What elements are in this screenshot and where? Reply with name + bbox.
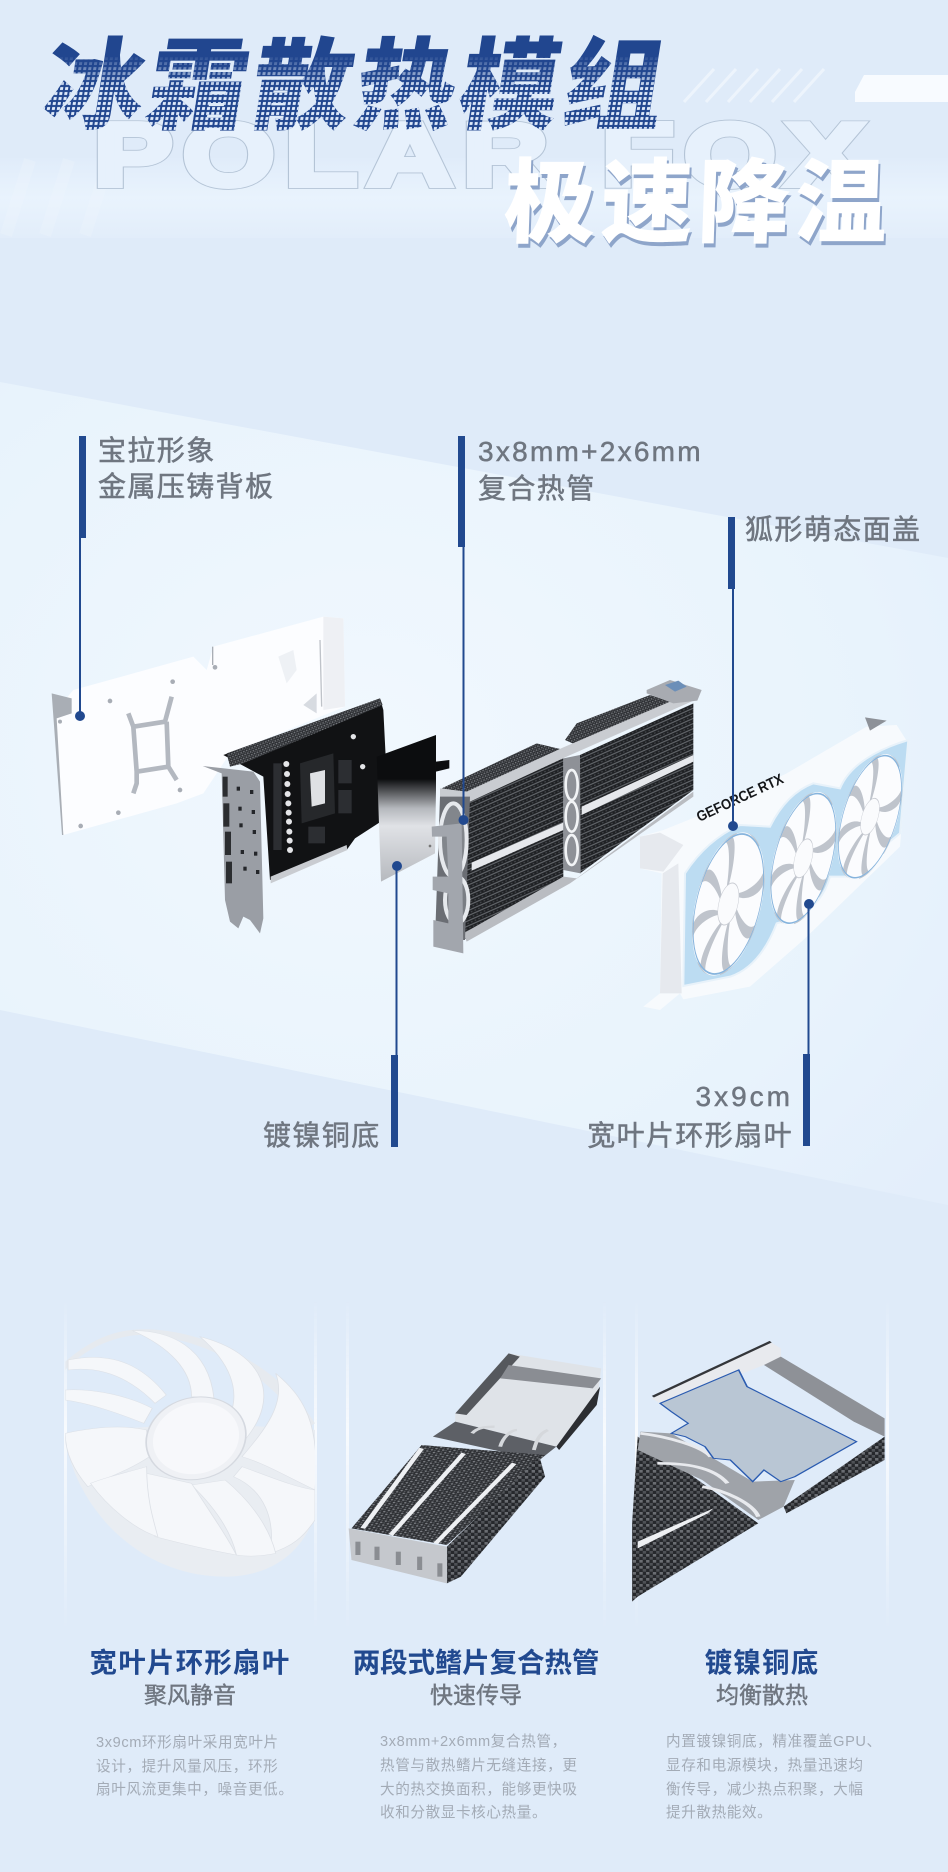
exploded view: backplate (52, 617, 345, 835)
decorative white stripes (6, 69, 948, 235)
column 2 text: 两段式鳍片复合热管: 3x8mm+2x6mm复合热管， (380, 1732, 567, 1750)
callout: 宽叶片环形扇叶: 宽叶片环形扇叶 (587, 1120, 793, 1151)
column 3 text: 镀镍铜底: 镀镍铜底 (705, 1647, 819, 1678)
subtitle: 极速降温: 极速降温 (502, 152, 894, 255)
callout: 宝拉形象金属压铸背板: 宝拉形象 (98, 435, 216, 466)
column 2 text: 两段式鳍片复合热管: 收和分散显卡核心热量。 (380, 1804, 547, 1821)
callout: 狐形萌态面盖 (728, 514, 921, 831)
column 3 text: 镀镍铜底: 提升散热能效。 (666, 1804, 772, 1821)
callout: 镀镍铜底: 镀镍铜底 (263, 1120, 381, 1151)
column 2 text: 两段式鳍片复合热管: 快速传导 (430, 1682, 522, 1708)
panel image: two-stage fin heatsink (349, 1353, 601, 1583)
panel image: nickel-plated base close-up (632, 1342, 885, 1602)
callout: 复合热管 (458, 436, 702, 825)
column 1 text: 宽叶片环形扇叶: 宽叶片环形扇叶 (90, 1647, 290, 1678)
column 3 text: 镀镍铜底: 内置镀镍铜底，精准覆盖GPU、 (666, 1733, 882, 1750)
column 2 text: 两段式鳍片复合热管: 两段式鳍片复合热管 (353, 1647, 599, 1678)
column 1 text: 宽叶片环形扇叶: 扇叶风流更集中，噪音更低。 (96, 1781, 294, 1798)
exploded view: nickel-plated copper base (377, 735, 449, 882)
column 1 text: 宽叶片环形扇叶 (90, 1647, 294, 1798)
column 1 text: 宽叶片环形扇叶: 3x9cm环形扇叶采用宽叶片 (96, 1734, 279, 1751)
background wordmark: POLAR FOX: POLAR FOX (94, 105, 875, 204)
callout: 宝拉形象金属压铸背板: 金属压铸背板 (98, 471, 274, 502)
callout: 镀镍铜底 (263, 861, 402, 1151)
exploded view: white shroud with three fans (640, 717, 932, 1012)
column 3 text: 镀镍铜底 (666, 1647, 882, 1821)
column 3 text: 镀镍铜底: 衡传导，减少热点积聚，大幅 (666, 1781, 864, 1798)
subtitle: 极速降温: 极速降温 (504, 156, 896, 259)
callout: 狐形萌态面盖: 狐形萌态面盖 (745, 514, 921, 545)
column 2 text: 两段式鳍片复合热管 (353, 1647, 599, 1821)
column 1 text: 宽叶片环形扇叶: 聚风静音 (144, 1682, 236, 1708)
column 2 text: 两段式鳍片复合热管: 热管与散热鳍片无缝连接，更 (380, 1757, 578, 1774)
callout: 宝拉形象金属压铸背板 (75, 435, 274, 721)
callout: 宽叶片环形扇叶 (587, 899, 814, 1151)
column 2 text: 两段式鳍片复合热管: 大的热交换面积，能够更快吸 (380, 1780, 578, 1798)
background wordmark: POLAR FOX: POLAR FOX (94, 105, 875, 204)
column 3 text: 镀镍铜底: 均衡散热 (716, 1682, 808, 1708)
column 1 text: 宽叶片环形扇叶: 设计，提升风量风压，环形 (96, 1758, 278, 1775)
callout: 复合热管: 复合热管 (478, 473, 596, 504)
column 3 text: 镀镍铜底: 显存和电源模块，热量迅速均 (666, 1757, 864, 1774)
callout: 复合热管: 3x8mm+2x6mm (478, 436, 702, 467)
exploded view: heatsink with heat pipes (432, 680, 702, 953)
panel image: fan close-up (65, 1329, 318, 1577)
callout: 宽叶片环形扇叶: 3x9cm (696, 1081, 793, 1112)
title: 冰霜散热模组: 冰霜散热模组 (36, 32, 677, 143)
GEFORCE RTX logo: GEFORCE RTX (694, 771, 786, 826)
exploded view: circuit board (203, 698, 386, 933)
title: 冰霜散热模组: 冰霜散热模组 (36, 32, 677, 143)
